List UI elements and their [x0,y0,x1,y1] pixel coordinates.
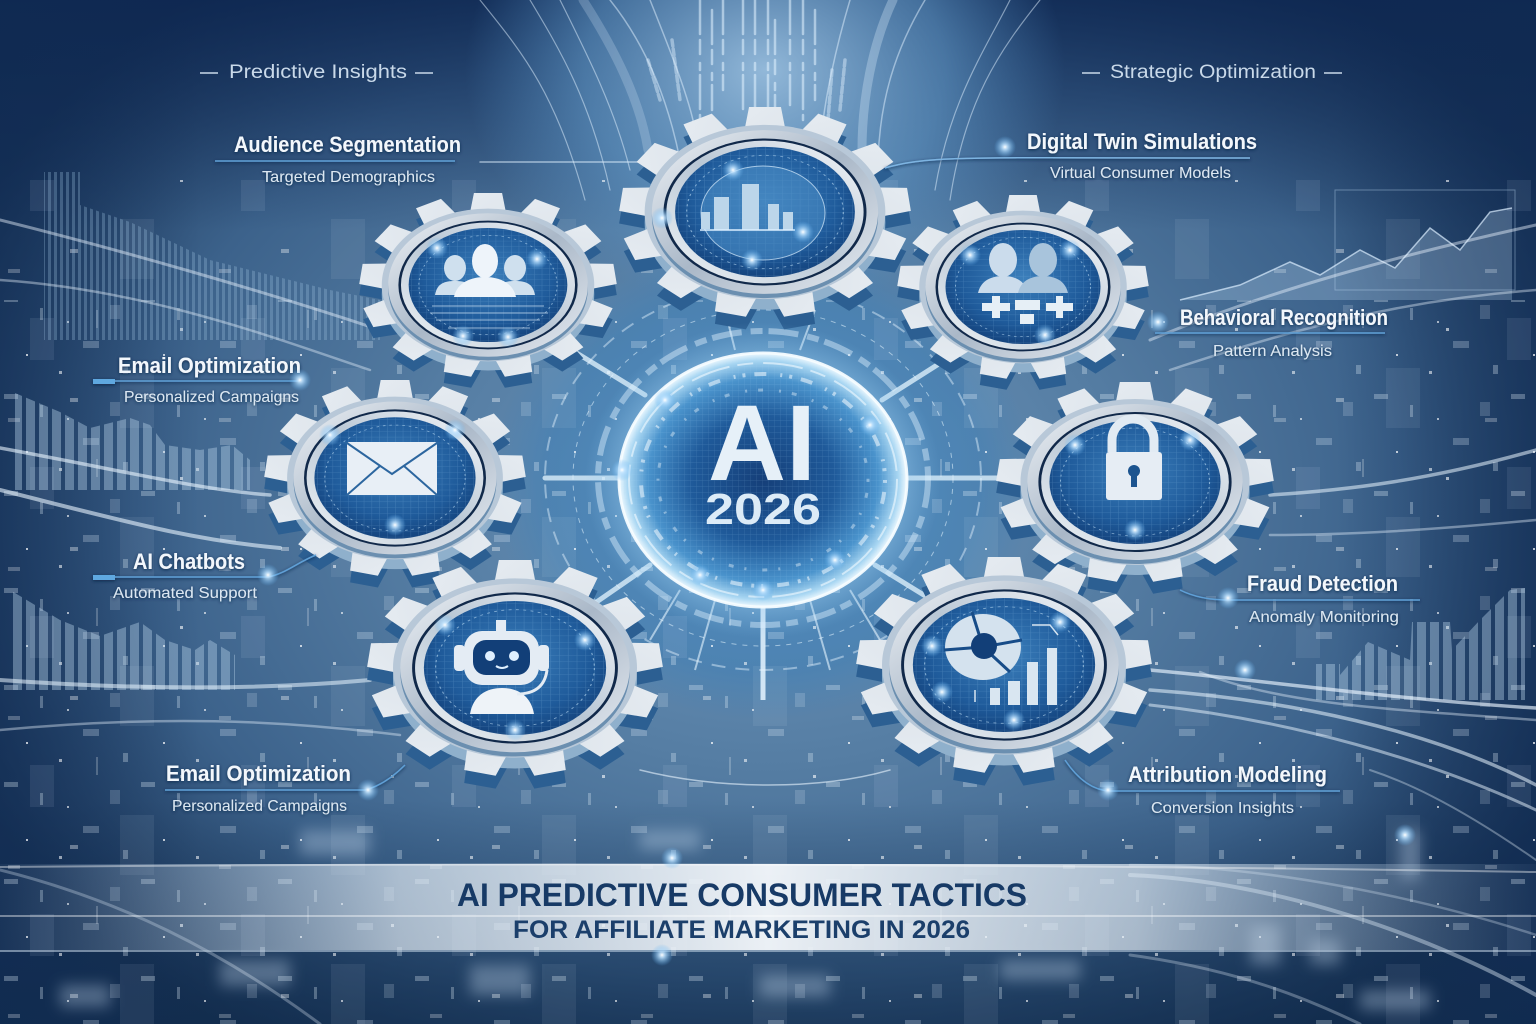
gear: audience segmentation [359,193,617,389]
chart: left middle bars [15,393,250,490]
label: attribution modeling [1065,760,1340,817]
label: behavioral recognition [1155,305,1388,360]
light streaks [0,220,1536,1024]
title line 2: FOR AFFILIATE MARKETING IN 2026 [513,916,970,944]
chart: left upper bars [44,172,380,340]
icon: pie chart and bars [944,612,1058,705]
title line 1: AI PREDICTIVE CONSUMER TACTICS [457,877,1027,913]
icon: twin people [978,243,1073,324]
connector glow points [257,136,1416,846]
label: email optimization lower: Email Optimization [166,761,351,786]
gear: attribution [855,557,1153,787]
label: fraud detection: Fraud Detection [1247,571,1398,596]
label: fraud detection: Anomaly Monitoring [1249,609,1399,626]
title banner [0,847,1536,966]
label: attribution modeling: Conversion Insights [1151,800,1294,817]
top centre data rays [480,0,1040,200]
central orb [585,322,941,638]
label: audience segmentation: Targeted Demographics [262,169,435,186]
gear: digital twin [897,195,1149,391]
label: digital twin simulations: Digital Twin Simulations [1027,129,1257,154]
icon: people [435,244,535,297]
gear: fraud detection [996,382,1274,595]
label: ai chatbots: AI Chatbots [133,549,245,574]
label: digital twin simulations: Virtual Consumer Models [1050,165,1231,182]
label: email optimization upper: Personalized Campaigns [124,389,299,406]
label: email optimization lower: Personalized Campaigns [172,798,347,815]
icon: padlock [1106,419,1162,500]
gear: predictive bars [618,107,912,330]
icon: robot [454,620,549,714]
orb year: 2026 [705,485,821,534]
label: fraud detection [1180,571,1420,626]
label: audience segmentation [215,132,461,186]
gear: chatbot [366,560,664,790]
label: email optimization upper: Email Optimization [118,353,301,378]
bottom blurred lights [60,830,1430,1010]
heading: strategic optimization: Strategic Optimization [1110,62,1316,83]
label: behavioral recognition: Pattern Analysis [1213,343,1332,360]
label: email optimization upper [93,353,301,406]
chart: right lower bars [1316,588,1525,700]
icon: envelope [347,442,437,495]
chart: left lower bars [10,590,235,690]
icon: bar chart [700,166,825,260]
central rings and rays [545,286,1005,700]
label: attribution modeling: Attribution Modeling [1128,762,1327,787]
label: ai chatbots [93,549,316,602]
label: email optimization lower [165,761,405,815]
label: audience segmentation: Audience Segmentation [234,132,461,157]
label: ai chatbots: Automated Support [113,585,258,602]
label: behavioral recognition: Behavioral Recognition [1180,305,1388,330]
orb title: AI [708,382,816,503]
chart: right line graph [1180,190,1515,300]
label: digital twin simulations [885,129,1257,182]
gear: email [264,380,526,588]
heading: predictive insights: Predictive Insights [229,62,407,83]
